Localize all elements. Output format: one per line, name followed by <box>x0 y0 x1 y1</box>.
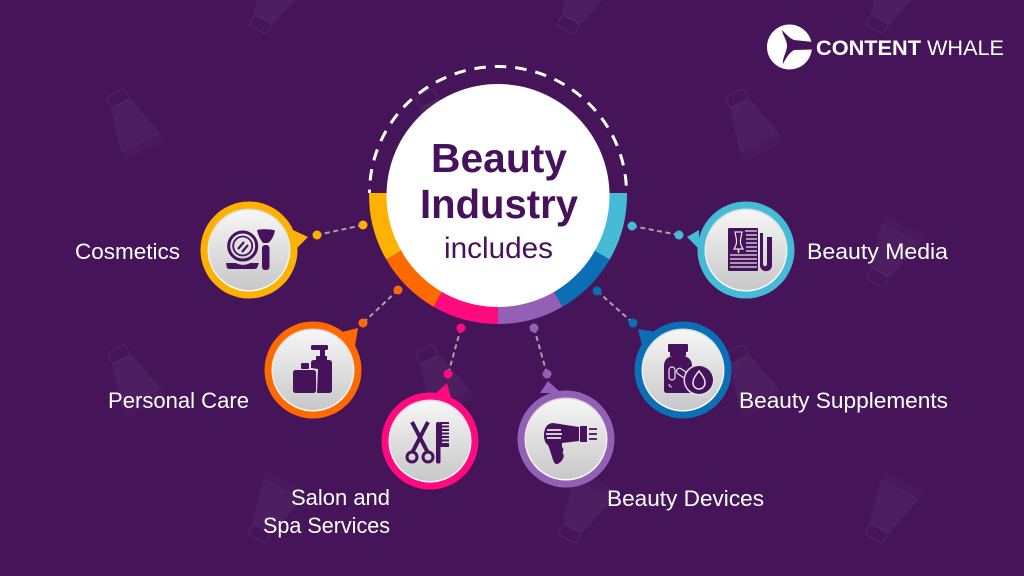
logo: Content Whale: WHALE <box>927 37 1004 60</box>
bubble <box>687 202 794 298</box>
icon: fashion magazine <box>728 228 772 271</box>
title <box>420 135 578 265</box>
segmented ring <box>378 193 618 315</box>
label: Spa Services <box>263 513 390 538</box>
label: Cosmetics <box>75 239 180 264</box>
bubble <box>264 322 362 418</box>
bubble <box>518 381 614 488</box>
item: Salon and Spa Services <box>263 324 478 538</box>
icon: bottles <box>293 345 332 393</box>
item: Cosmetics <box>75 202 368 298</box>
label <box>263 485 390 538</box>
dashed arc <box>370 67 626 193</box>
bubble <box>382 383 478 490</box>
label: Salon and <box>291 485 390 510</box>
logo: Content Whale: CONTENT <box>816 37 921 60</box>
center circle <box>386 84 610 307</box>
label: Beauty Media <box>807 239 949 264</box>
icon: compact and brush <box>226 229 275 270</box>
icon: scissors and comb <box>407 422 449 464</box>
title: Beauty <box>431 135 567 181</box>
logo: Content Whale <box>767 24 1004 70</box>
bubble <box>634 322 732 418</box>
connector <box>628 222 684 240</box>
icon: supplement bottle and drop <box>664 344 714 396</box>
title: includes <box>444 232 553 265</box>
title: Industry <box>420 181 578 227</box>
bubble <box>200 202 308 298</box>
connector <box>444 324 466 378</box>
item: Personal Care <box>108 286 402 418</box>
icon: hair dryer <box>544 423 597 464</box>
item: Beauty Media <box>628 202 949 298</box>
connector <box>592 286 638 328</box>
background pattern: tubes <box>96 0 925 549</box>
label: Personal Care <box>108 388 249 413</box>
label: Beauty Devices <box>607 486 764 511</box>
connector <box>530 324 552 378</box>
label: Beauty Supplements <box>739 388 948 413</box>
connector <box>312 220 368 240</box>
connector <box>358 286 402 328</box>
item: Beauty Supplements <box>592 286 948 418</box>
item: Beauty Devices <box>518 324 764 511</box>
